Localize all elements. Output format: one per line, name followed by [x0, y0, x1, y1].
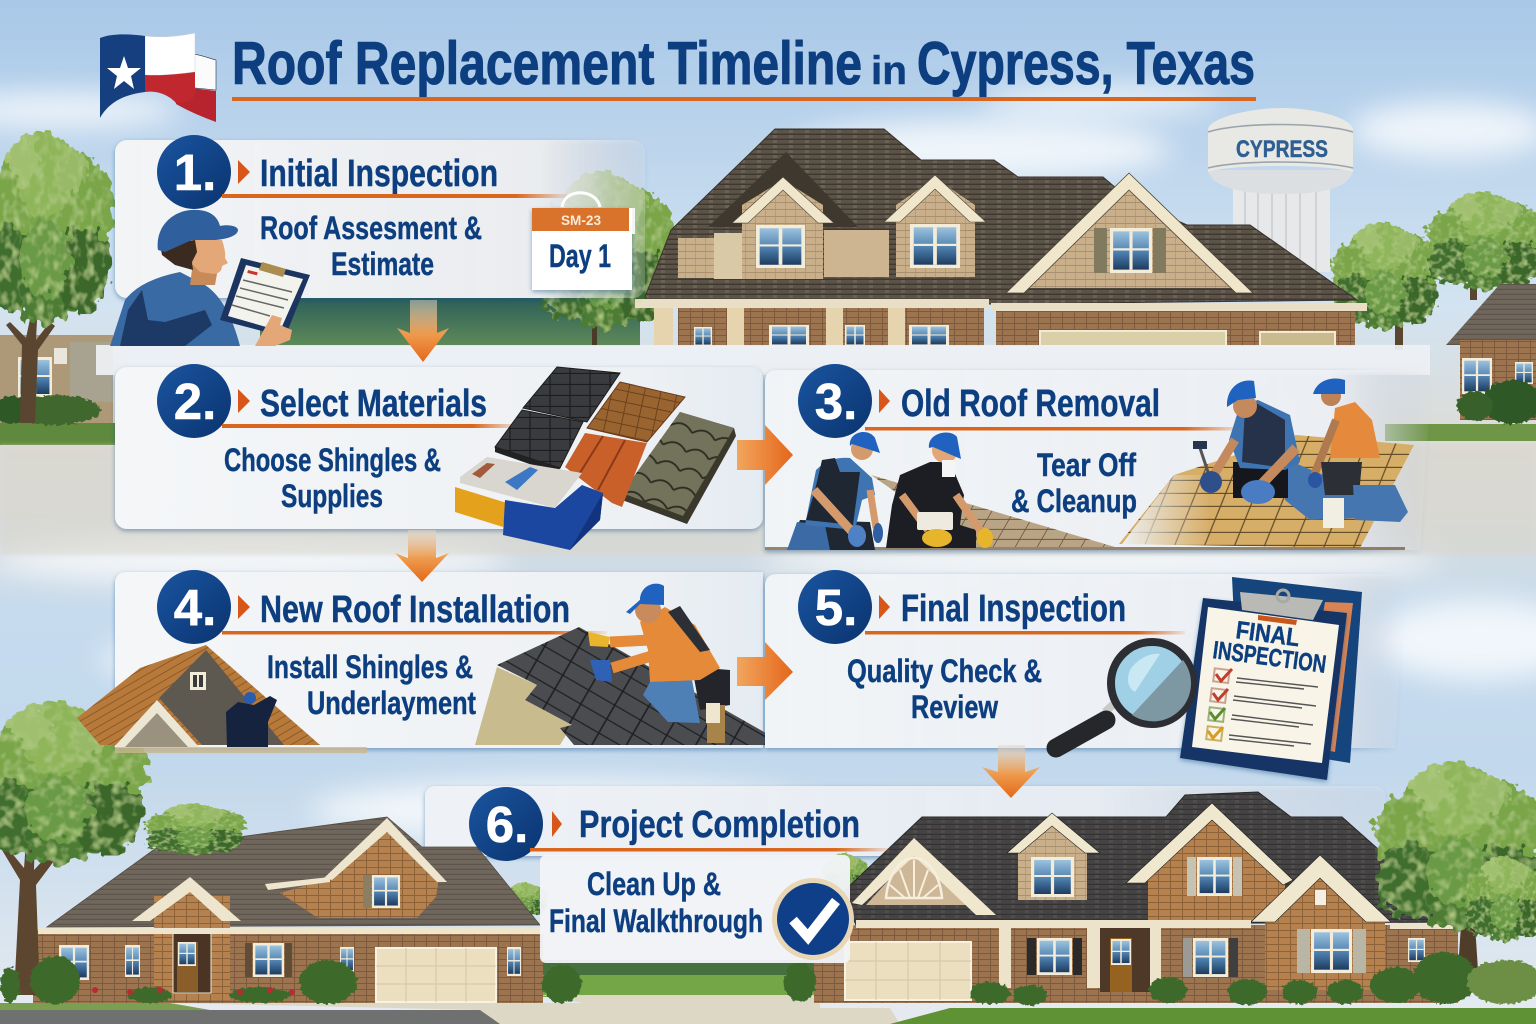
- icon: calendar day 1: SM-23: [561, 212, 601, 228]
- description card: Final Walkthrough: [549, 903, 763, 939]
- roof deck right: [765, 435, 1414, 550]
- icon: calendar day 1: [532, 193, 635, 290]
- step number 4: 4.: [174, 579, 216, 636]
- icon: magnifying glass: [1056, 642, 1193, 748]
- step number 5: [798, 570, 872, 644]
- pointer: [879, 595, 890, 619]
- description card: Clean Up &: [587, 866, 721, 902]
- trees: upper right: [1331, 192, 1536, 350]
- pointer: [552, 811, 562, 837]
- step number 4: [157, 570, 231, 644]
- illustration: workers tearing off left: [787, 432, 993, 550]
- panel: step 3 old roof removal: [765, 364, 1432, 550]
- description: Quality Check &: [847, 653, 1042, 689]
- description: Roof Assesment &: [260, 210, 482, 246]
- roof deck left: [871, 475, 1115, 547]
- ground and shrubs: [0, 952, 1536, 1024]
- tree: lower left: [0, 701, 246, 995]
- house: right background: [1446, 284, 1536, 424]
- house: left background: [0, 335, 113, 425]
- step number 3: 3.: [815, 373, 857, 430]
- step number 1: [157, 135, 231, 209]
- heading: Old Roof Removal: [901, 383, 1160, 425]
- hill behind first panel: [260, 298, 640, 346]
- heading: Initial Inspection: [260, 153, 498, 195]
- description: [1011, 447, 1137, 519]
- heading: Project Completion: [579, 804, 860, 846]
- step number 3: [798, 364, 872, 438]
- description card: [540, 855, 850, 963]
- house: bottom right: [814, 792, 1467, 1003]
- step number 5: 5.: [815, 579, 857, 636]
- panel: step 6 background: [425, 786, 1385, 856]
- panel: step 4 new roof installation: [77, 570, 787, 753]
- illustration: workers tearing off right: [1193, 379, 1408, 528]
- panel: step 1 initial inspection: [110, 135, 645, 346]
- arrow: step 1 to 2: [397, 300, 449, 362]
- description: [260, 210, 482, 282]
- description: Tear Off: [1037, 447, 1136, 483]
- tree: lower right: [1374, 762, 1536, 970]
- illustration: final inspection clipboard: FINAL: [1234, 616, 1301, 652]
- description: & Cleanup: [1011, 483, 1137, 519]
- step number 2: [157, 364, 231, 438]
- description: Choose Shingles &: [224, 442, 441, 478]
- description: [847, 653, 1042, 725]
- title block: [100, 30, 1256, 122]
- icon: Texas flag: [100, 33, 216, 122]
- illustration: roofer laying shingles: [475, 584, 787, 745]
- pointer: [238, 389, 250, 413]
- step number 1: 1.: [174, 144, 216, 201]
- description: [267, 649, 476, 721]
- arrow: step 2 to 3: [737, 425, 793, 485]
- water tower: [1208, 108, 1353, 272]
- description: [224, 442, 441, 514]
- illustration: inspector with clipboard: [110, 210, 310, 346]
- description: Estimate: [331, 246, 434, 282]
- panel: step 6 project completion: [469, 787, 890, 963]
- tree: behind lower left house: [502, 853, 868, 917]
- tree: upper left: [0, 132, 114, 423]
- lawn behind driveway: [540, 960, 820, 1010]
- house: bottom left: [33, 817, 543, 1003]
- title text: Roof Replacement Timeline: [232, 30, 862, 97]
- icon: completion check badge: [772, 878, 854, 960]
- title block: in: [871, 49, 907, 93]
- description: Review: [911, 689, 998, 725]
- illustration: final inspection clipboard: [1180, 577, 1362, 780]
- house: top main: [635, 129, 1367, 346]
- white strip behind panels: [96, 345, 1430, 375]
- illustration: final inspection clipboard: INSPECTION: [1211, 636, 1328, 679]
- arrow: step 5 to 6: [982, 745, 1040, 798]
- heading: Final Inspection: [901, 588, 1126, 630]
- arrow: step 2 to 4: [395, 530, 449, 582]
- illustration: shingle samples and supplies: [455, 367, 736, 550]
- description: Supplies: [281, 478, 383, 514]
- tree: behind first panel: [538, 171, 674, 345]
- panel: step 5 final inspection: [765, 570, 1405, 780]
- pointer: [879, 389, 890, 413]
- description: Install Shingles &: [267, 649, 473, 685]
- heading: New Roof Installation: [260, 589, 570, 631]
- heading: Select Materials: [260, 383, 487, 425]
- description: Underlayment: [307, 685, 476, 721]
- tower label: CYPRESS: [1236, 136, 1328, 163]
- step number 6: [469, 787, 543, 861]
- step number 2: 2.: [174, 373, 216, 430]
- illustration: small house with roofer: [77, 645, 320, 747]
- panel: step 2 select materials: [115, 364, 763, 550]
- step number 6: 6.: [486, 796, 528, 853]
- pointer: [238, 595, 250, 619]
- icon: calendar day 1: Day 1: [549, 238, 611, 274]
- pointer: [238, 160, 250, 184]
- clipboard: [220, 258, 310, 337]
- arrow: step 4 to 5: [737, 642, 793, 700]
- title block: Cypress, Texas: [917, 30, 1255, 97]
